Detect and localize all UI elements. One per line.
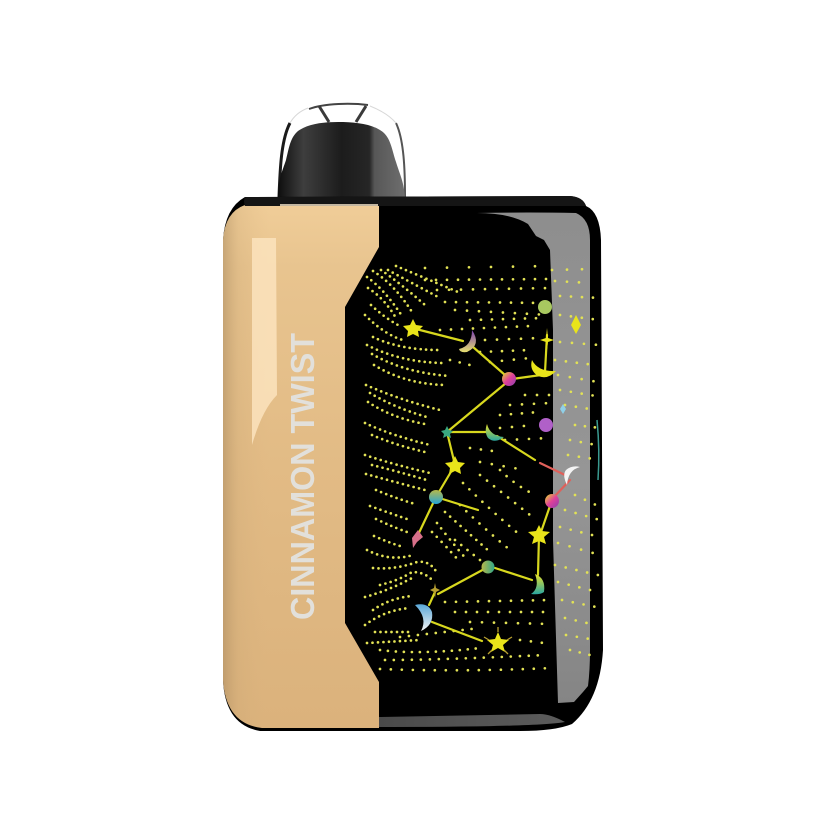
tan panel [223, 205, 379, 728]
glass cap outline [279, 106, 406, 198]
bottom gray strip [379, 714, 565, 727]
constellation [403, 300, 581, 654]
star rays [484, 627, 512, 654]
black dome [278, 122, 405, 198]
product name: CINNAMON TWIST [284, 333, 321, 620]
gray glossy reflection [477, 212, 590, 703]
rocket [412, 530, 423, 548]
black body shell [223, 196, 603, 731]
constellation lines [412, 328, 570, 641]
device body [223, 196, 603, 731]
mouthpiece [278, 104, 406, 198]
right side dark edge with faint art [597, 420, 599, 480]
planets [502, 372, 516, 386]
top rim [244, 196, 586, 206]
top highlight line [379, 204, 495, 206]
tan glossy highlight [252, 238, 277, 445]
sparkle [560, 404, 566, 414]
crescent moons [459, 330, 476, 352]
teal star [441, 426, 453, 438]
dot field [365, 266, 600, 670]
stars [403, 315, 581, 652]
chrome tip [309, 104, 368, 109]
